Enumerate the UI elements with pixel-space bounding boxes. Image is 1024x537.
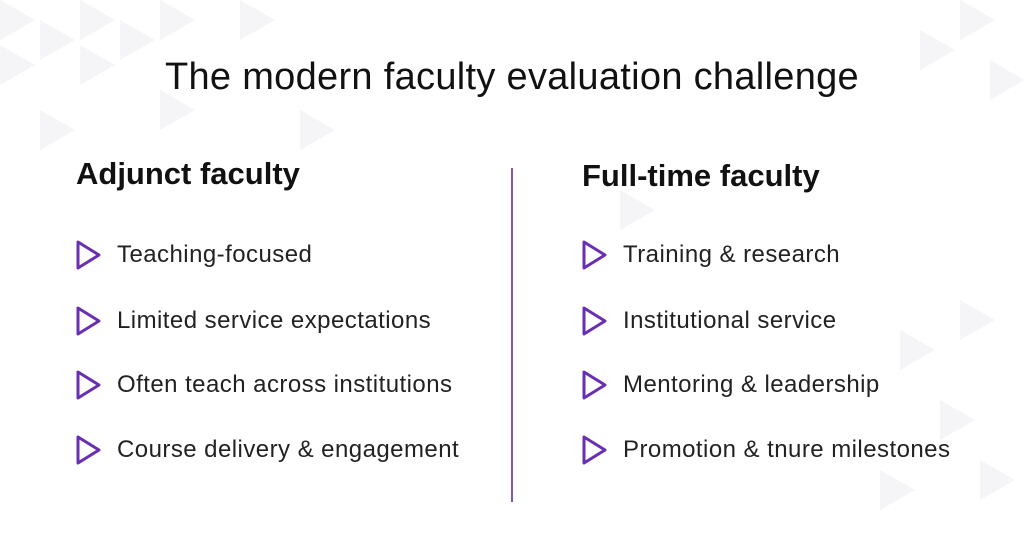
list: adjunct: Course delivery & engagement — [117, 436, 459, 463]
heading: full-time faculty: Full-time faculty — [582, 158, 820, 193]
item — [76, 240, 312, 270]
list: adjunct: Often teach across institutions — [117, 371, 452, 398]
title: The modern faculty evaluation challenge — [165, 56, 859, 98]
list: full-time: Institutional service — [623, 307, 837, 334]
item — [582, 370, 880, 400]
list: adjunct — [76, 240, 459, 465]
heading: adjunct faculty: Adjunct faculty — [76, 156, 300, 191]
item — [76, 370, 452, 400]
list: full-time: Promotion & tnure milestones — [623, 436, 950, 463]
item — [76, 306, 431, 336]
list: adjunct: Limited service expectations — [117, 307, 431, 334]
item — [76, 436, 459, 465]
item — [582, 306, 837, 336]
list: adjunct: Teaching-focused — [117, 241, 312, 268]
list: full-time: Training & research — [623, 241, 840, 268]
list: full-time — [582, 240, 950, 465]
item — [582, 240, 840, 270]
list: full-time: Mentoring & leadership — [623, 371, 880, 398]
divider — [511, 168, 513, 502]
item — [582, 436, 950, 465]
